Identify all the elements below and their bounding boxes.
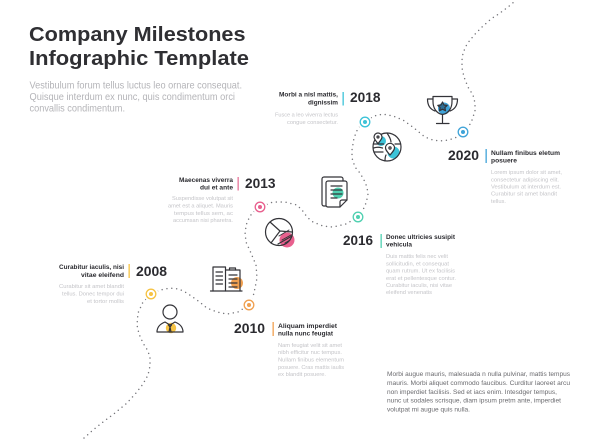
- 2020 year: 2020: [448, 148, 479, 163]
- milestone 2010: [210, 267, 345, 378]
- 2020 description: Lorem ipsum dolor sit amet,: [491, 170, 563, 176]
- 2008 heading: [59, 264, 124, 279]
- 2018 marker: [358, 114, 372, 130]
- icon: globe with pins: [373, 133, 401, 161]
- 2018 description: [275, 112, 338, 126]
- 2018 description: Fusce a leo viverra lectus: [275, 112, 338, 118]
- 2008 description: tellus. Donec tempor dui: [62, 292, 124, 298]
- 2020 heading: posuere: [491, 158, 517, 164]
- 2013 marker: [252, 200, 268, 214]
- 2008 description: Curabitur sit amet blandit: [59, 284, 125, 290]
- 2010 divider: [272, 322, 274, 336]
- 2016 heading: Donec ultricies susipit: [386, 234, 456, 241]
- 2020 description: Curabitur sit amet blandit: [491, 192, 558, 198]
- 2020 description: tellus.: [491, 199, 506, 205]
- 2013 description: Suspendisse volutpat sit: [172, 196, 234, 202]
- title: Company Milestones: [29, 23, 246, 46]
- 2016 description: [386, 254, 456, 296]
- dotted timeline path: [84, 1, 515, 438]
- 2008 heading: Curabitur iaculis, nisi: [59, 264, 124, 271]
- bottom paragraph: non imperdiet facilisis. Sed et iacs enim. Intesdger tempus,: [387, 389, 557, 396]
- subtitle text block: convallis condimentum.: [30, 104, 125, 114]
- 2010 description: ex blandit posuere.: [278, 372, 326, 378]
- 2016 description: quam rutrum. Ut ex facilisis: [386, 268, 455, 274]
- 2010 description: Nam feugiat velit sit amet: [278, 343, 343, 349]
- 2010 description: posuere. Cras mattis iaulis: [278, 365, 344, 371]
- 2016 description: eleifend venenatis: [386, 290, 432, 296]
- bottom paragraph: volutpat mi augue quis nulla.: [387, 406, 470, 414]
- 2013 description: tempus tellus sem, ac: [174, 211, 233, 217]
- 2018 divider: [342, 92, 344, 106]
- icon: documents: [322, 177, 347, 207]
- icon: businessman: [157, 305, 183, 333]
- 2018 heading: [279, 92, 338, 106]
- milestone 2020: [428, 96, 563, 205]
- 2020 heading: [491, 150, 560, 164]
- 2010 year: 2010: [234, 321, 265, 336]
- title: Infographic Template: [29, 47, 249, 70]
- 2013 description: [168, 196, 234, 224]
- bottom paragraph: Morbi augue mauris, malesuada n nulla pulvinar, mattis tempus: [387, 371, 571, 378]
- 2013 year: 2013: [245, 176, 276, 191]
- icon: trophy: [428, 96, 458, 124]
- bottom paragraph: [387, 371, 571, 414]
- 2018 description: congue consectetur.: [287, 120, 338, 126]
- 2016 description: erat et pellentesque contur.: [386, 276, 456, 282]
- title: [29, 23, 249, 70]
- 2016 heading: vehicula: [386, 242, 412, 248]
- 2020 divider: [486, 149, 487, 163]
- bottom paragraph: nunc ut sodales scrisque, diam ipsum pretm ante, imperdiet: [387, 398, 561, 404]
- milestone 2018: [275, 90, 401, 161]
- 2010 description: Nullam finibus elementum: [278, 358, 345, 364]
- 2016 description: Duis mattis felis nec velit: [386, 254, 449, 260]
- subtitle text block: Quisque interdum ex nunc, quis condimentum orci: [30, 92, 235, 103]
- 2016 description: Curabitur iaculis, nisi vitae: [386, 283, 452, 289]
- 2010 heading: [278, 323, 338, 338]
- 2008 divider: [128, 264, 130, 278]
- 2008 marker: [144, 286, 158, 302]
- icon: pie chart: [266, 218, 294, 248]
- 2016 description: sollicitudin, et consequat: [386, 262, 450, 268]
- 2020 marker: [456, 124, 470, 140]
- 2010 description: nibh efficitur nuc tempus.: [278, 350, 342, 356]
- 2013 heading: Maecenas viverra: [179, 177, 233, 184]
- 2010 heading: nulla nunc feugiat: [278, 330, 334, 338]
- 2018 heading: dignissim: [308, 100, 338, 106]
- 2008 year: 2008: [136, 264, 167, 279]
- 2013 description: amet est a aliquet. Mauris: [168, 204, 233, 210]
- 2010 description: [278, 343, 345, 378]
- 2013 description: accumsan nisi pharetra.: [173, 218, 233, 224]
- 2013 divider: [238, 177, 239, 190]
- milestone 2013: [168, 176, 294, 248]
- 2008 description: et tortor mollis: [87, 299, 124, 305]
- icon: office buildings: [210, 267, 243, 291]
- 2020 description: consectetur adipiscing elit.: [491, 178, 559, 184]
- 2010 heading: Aliquam imperdiet: [278, 323, 338, 330]
- milestone 2008: [59, 264, 183, 333]
- 2020 description: Vestibulum at interdum est.: [491, 184, 561, 190]
- milestone 2016: [322, 177, 456, 296]
- 2010 marker: [242, 298, 256, 312]
- subtitle text block: Vestibulum forum tellus luctus leo ornare consequat.: [30, 80, 242, 92]
- 2016 year: 2016: [343, 233, 373, 248]
- 2016 heading: [386, 234, 456, 248]
- 2018 year: 2018: [350, 90, 381, 105]
- 2020 heading: Nullam finibus eletum: [491, 150, 560, 157]
- subtitle text block: [30, 80, 242, 114]
- 2013 heading: [179, 177, 233, 192]
- 2016 divider: [380, 234, 382, 248]
- 2016 marker: [350, 210, 366, 224]
- 2008 description: [59, 284, 125, 305]
- 2013 heading: dui et ante: [200, 184, 233, 192]
- 2018 heading: Morbi a nisl mattis,: [279, 92, 338, 98]
- 2008 heading: vitae eleifend: [81, 272, 124, 279]
- bottom paragraph: mauris. Morbi aliquet commodo faucibus. Curditur laoreet arcu: [387, 380, 570, 387]
- 2020 description: [491, 170, 563, 205]
